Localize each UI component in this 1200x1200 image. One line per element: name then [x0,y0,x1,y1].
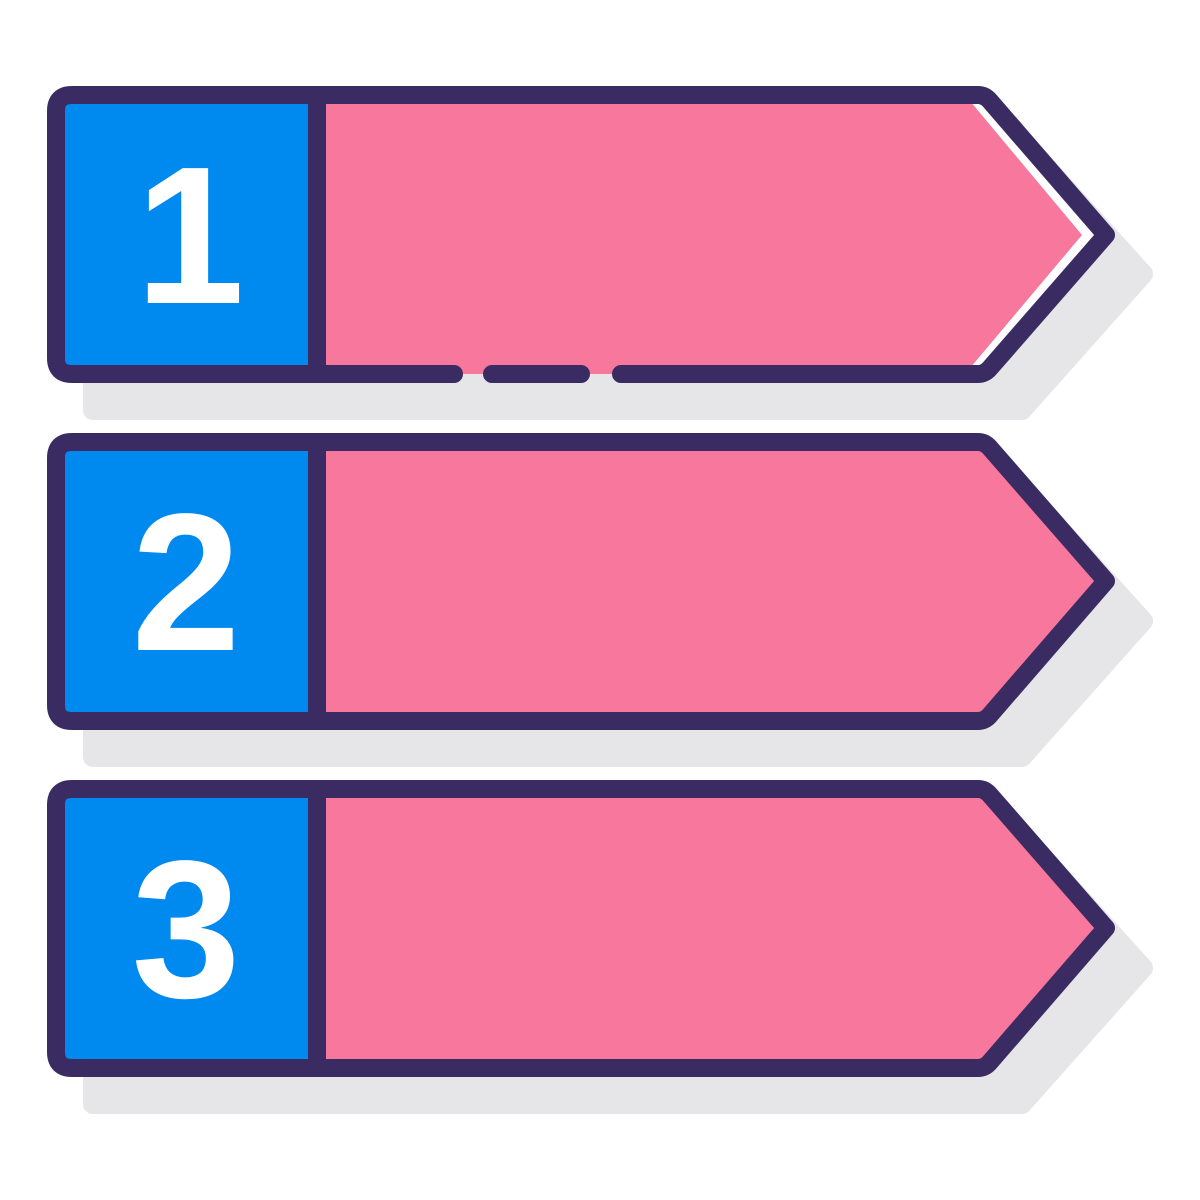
arrow 2 body [317,442,1106,721]
arrow 3 body [317,789,1106,1068]
shadow 2 [93,487,1143,757]
row 3 [56,789,1143,1104]
number 2: 2 [131,473,241,692]
row 1 [56,95,1143,410]
outline 1 [56,95,1106,374]
outline 3 [56,789,1106,1068]
number tab 1 [56,95,317,374]
number 3: 3 [131,820,241,1039]
arrow 1 body [317,95,1082,374]
row 2 [56,442,1143,757]
number tab 3 [56,789,317,1068]
outline 2 [56,442,1106,721]
arrow 1 white base [317,95,1106,374]
shadow 1 [93,140,1143,410]
number tab 2 [56,442,317,721]
number 1: 1 [135,126,245,345]
shadow 3 [93,834,1143,1104]
